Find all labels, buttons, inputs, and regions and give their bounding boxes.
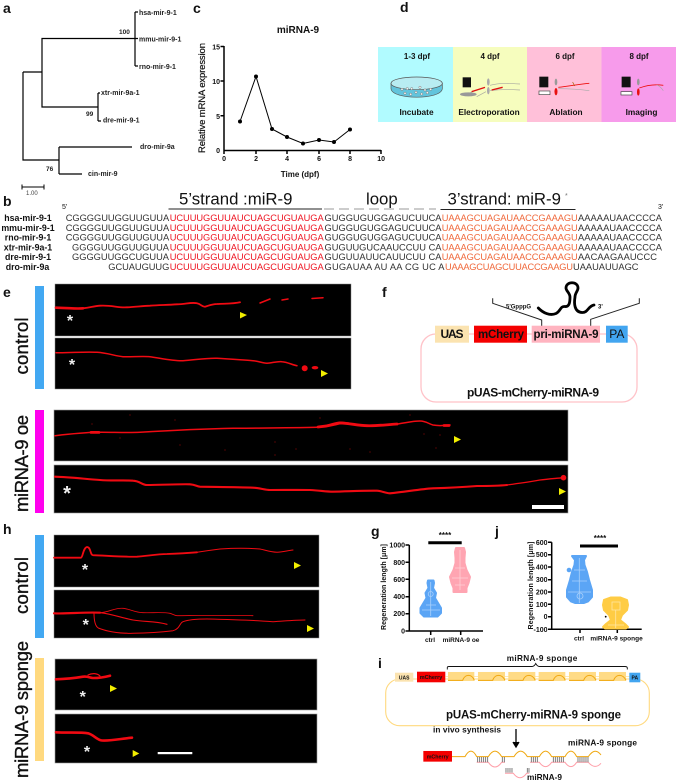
axis tick labels: 0 (216, 148, 220, 155)
insert lines and hairpin: 5'GpppG (506, 304, 531, 310)
x labels (425, 637, 480, 644)
aligned sequences: UAAAGCUAGAUAACCGAAAGU (442, 232, 578, 242)
species names: hsa-mir-9-1 (4, 213, 52, 223)
stage: electroporation: Electroporation (458, 107, 520, 117)
y tick labels: 400 (536, 564, 548, 572)
stage: ablation: 6 dpf (555, 52, 575, 61)
scale bar (158, 752, 192, 754)
aligned sequences (66, 213, 663, 272)
icon: petri dish (391, 77, 442, 97)
axis tick labels: 15 (212, 44, 220, 52)
axis tick labels: 10 (212, 79, 220, 86)
species labels: hsa-mir-9-1 (139, 10, 177, 17)
y tick labels (389, 542, 405, 636)
image: sponge 1: * (80, 689, 87, 706)
image: control 2 (55, 338, 351, 389)
icon: ablation rig (539, 77, 589, 95)
label b: b (3, 193, 12, 209)
strand headers: 5’ (62, 204, 68, 211)
aligned sequences: GCUAUGUUG (108, 262, 169, 272)
label e: e (3, 284, 11, 300)
panel h: axon images, control and miRNA-9 sponge (3, 521, 319, 778)
label f: f (382, 284, 387, 300)
stage: ablation: Ablation (549, 107, 583, 117)
axes (548, 542, 642, 633)
image: miRNA-9 oe 2: * (63, 483, 71, 505)
y tick labels: 300 (536, 577, 548, 584)
group label: miRNA-9 sponge (11, 641, 44, 778)
axis tick labels: 10 (377, 156, 385, 163)
bound miRNA strands (477, 762, 601, 767)
pri-miRNA-9 element (532, 326, 600, 343)
species labels: xtr-mir-9a-1 (101, 90, 140, 97)
x labels: ctrl (574, 636, 584, 642)
axis tick labels (212, 44, 385, 163)
species names: xtr-mir-9a-1 (4, 242, 52, 252)
mCherry box: mCherry (427, 754, 449, 760)
mCherry element: mCherry (478, 329, 525, 341)
insert lines and hairpin (493, 283, 639, 326)
group label: miRNA-9 oe: miRNA-9 oe (11, 415, 32, 512)
panel i: pUAS-mCherry-miRNA-9 sponge construct (378, 654, 649, 781)
chart title: miRNA-9 (277, 25, 320, 36)
image: sponge 2: * (84, 744, 91, 761)
image: control 1: * (82, 562, 89, 579)
stage: electroporation (453, 47, 527, 122)
image: sponge 1 (55, 659, 317, 710)
scale bar (532, 505, 564, 509)
strand headers (62, 190, 664, 211)
group label: control: control (11, 557, 32, 614)
aligned sequences: GGGGUUGGUUGUUA (72, 242, 170, 252)
mCherry element: mCherry (420, 675, 443, 681)
y tick labels: 200 (536, 590, 548, 596)
UAS element: UAS (440, 327, 464, 341)
label c: c (193, 0, 201, 16)
group label: control: control (11, 318, 32, 374)
y axis label: Relative mRNA expression (197, 43, 208, 153)
bootstrap values: 100 (119, 29, 130, 36)
scale bar: 1.00 (26, 191, 38, 197)
PA element: PA (632, 676, 638, 682)
violin: miRNA-9 oe (450, 548, 470, 592)
aligned sequences: UAAAGCUAGCUUACCGAAGU (445, 262, 573, 272)
strand headers: 3’strand: miR-9 (448, 190, 561, 208)
aligned sequences: UCUUUGGUUAUCUAGCUGUAUGA (170, 213, 324, 223)
bootstrap values (46, 29, 130, 173)
pri-miRNA-9 element: pri-miRNA-9 (534, 329, 598, 341)
plasmid outline (386, 679, 649, 726)
plasmid outline (421, 334, 637, 402)
insert lines and hairpin: 3' (598, 304, 603, 310)
y tick labels (533, 540, 548, 634)
image: control 2: * (69, 357, 76, 374)
species names: rno-mir-9-1 (5, 232, 51, 242)
aligned sequences: GUGAUAA AU AA CG UC A (324, 262, 445, 272)
sponge repeat units (445, 672, 630, 681)
arrow (513, 729, 519, 747)
image: sponge 2 (55, 714, 317, 763)
aligned sequences: AACAAGAAUCCC (578, 252, 657, 262)
icon: imaging rig (621, 77, 663, 96)
panel g: regeneration length violin plot (371, 523, 483, 644)
scale bar (22, 184, 44, 197)
mCherry element (474, 326, 527, 343)
aligned sequences: CGGGGUUGGUUGUUA (66, 213, 170, 223)
panel d: experimental timeline (378, 0, 676, 122)
panel a: phylogenetic tree (3, 0, 182, 197)
species names: dro-mir-9a (6, 262, 49, 272)
species labels: rno-mir-9-1 (139, 64, 176, 71)
y tick labels: 100 (536, 602, 548, 609)
group label: miRNA-9 oe (11, 410, 44, 513)
UAS element (435, 326, 469, 343)
base pair ticks (478, 757, 588, 762)
aligned sequences: UCUUUGGUUAUCUAGCUGUAUGA (170, 232, 324, 242)
violin: ctrl (420, 580, 441, 616)
panel j: regeneration length violin plot (494, 523, 643, 642)
group label: miRNA-9 sponge: miRNA-9 sponge (11, 641, 32, 778)
aligned sequences: UCUUUGGUUAUCUAGCUGUAUGA (170, 252, 324, 262)
x labels: miRNA-9 oe (443, 637, 480, 644)
stage: imaging (602, 47, 676, 122)
aligned sequences: GUGGUGUGGAGUCUUCA (324, 223, 442, 233)
free miRNA-9 (505, 773, 529, 778)
aligned sequences: AAAAAUAACCCCA (578, 232, 663, 242)
significance bar: **** (594, 534, 607, 543)
axis tick labels: 0 (222, 156, 226, 163)
y axis label: Regeneration length [μm] (381, 544, 388, 630)
plasmid name: pUAS-mCherry-miRNA-9 (467, 386, 599, 400)
icon: electroporation rig (460, 77, 520, 97)
panel c: miRNA-9 expression chart (193, 0, 385, 179)
species labels: dre-mir-9-1 (103, 118, 140, 124)
aligned sequences: UCUUUGGUUAUCUAGCUGUAUGA (170, 223, 324, 233)
aligned sequences: CGGGGUUGGUUGUUA (66, 223, 170, 233)
y tick labels: 800 (393, 560, 405, 567)
image: control 2 (54, 590, 319, 638)
aligned sequences: GUGGUGUGGAGUCUUCA (324, 213, 442, 223)
image: control 1 (54, 535, 319, 587)
y tick labels: 0 (544, 614, 548, 621)
image: control 2: * (83, 617, 90, 634)
aligned sequences: UAAAGCUAGAUAACCGAAAGU (442, 213, 578, 223)
stage: electroporation: 4 dpf (480, 52, 500, 61)
sponge strand (452, 751, 601, 757)
aligned sequences: GGGGUUGGCUGUUA (72, 252, 170, 262)
aligned sequences: AAAAAUAACCCCA (578, 223, 663, 233)
bracket (447, 664, 627, 670)
axes (220, 46, 381, 154)
axis tick labels: 6 (317, 156, 321, 163)
UAS element (395, 673, 413, 682)
label i: i (378, 655, 382, 671)
significance bar: **** (439, 531, 452, 540)
species names: dre-mir-9-1 (5, 252, 51, 262)
y tick labels: 0 (401, 628, 405, 636)
aligned sequences: UAAUAUUAGC (573, 262, 639, 272)
species labels: mmu-mir-9-1 (139, 36, 182, 44)
mCherry element (417, 672, 445, 682)
aligned sequences: UCUUUGGUUAUCUAGCUGUAUGA (170, 242, 324, 252)
panel f: pUAS-mCherry-miRNA-9 construct (382, 283, 639, 402)
species labels (88, 10, 182, 178)
axis tick labels: 8 (348, 156, 352, 163)
aligned sequences: AAAAAUAACCCCA (578, 242, 663, 252)
label g: g (371, 523, 380, 539)
stage: incubate: Incubate (399, 107, 434, 117)
sponge transcript label: miRNA-9 sponge (568, 738, 637, 748)
species labels: dro-mir-9a (140, 144, 175, 151)
axis tick labels: 5 (216, 114, 220, 121)
violin: ctrl (567, 556, 592, 603)
sponge heading: miRNA-9 sponge (507, 654, 578, 663)
group label: control (11, 535, 44, 638)
stage: imaging: Imaging (626, 107, 657, 117)
y axis label: Regeneration length [μm] (528, 542, 535, 630)
PA element: PA (609, 327, 624, 341)
y tick labels: 200 (393, 611, 405, 618)
label a: a (3, 0, 11, 16)
bootstrap values: 76 (46, 166, 54, 173)
image: miRNA-9 oe 1 (54, 410, 568, 461)
strand headers: * (565, 193, 568, 200)
axes (406, 545, 483, 635)
y tick labels: 400 (393, 594, 405, 601)
strand headers: 5’strand :miR-9 (179, 190, 292, 208)
significance bar (580, 534, 618, 546)
x labels: miRNA-9 sponge (590, 636, 643, 642)
aligned sequences: GUGGUGUGGAGUCUUCA (324, 232, 442, 242)
label j: j (494, 523, 499, 539)
y tick labels: 1000 (389, 542, 405, 550)
group label: control (11, 286, 44, 389)
image: control 1 (55, 284, 351, 336)
PA element (629, 673, 640, 682)
image: miRNA-9 oe 2 (54, 465, 568, 513)
species labels: cin-mir-9 (88, 171, 118, 178)
in vivo synthesis label: in vivo synthesis (433, 724, 501, 734)
aligned sequences: CGGGGUUGGUUGUUA (66, 232, 170, 242)
y tick labels: 600 (536, 540, 548, 547)
aligned sequences: UCUUUGGUUAUCUAGCUGUAUGA (170, 262, 324, 272)
strand headers: loop (366, 190, 398, 208)
panel e: axon images, control and miRNA-9 oe (3, 284, 568, 513)
y tick labels: 500 (536, 552, 548, 559)
stage: ablation (527, 47, 602, 122)
UAS element: UAS (399, 675, 410, 681)
axis tick labels: 2 (254, 156, 258, 163)
stage: incubate: 1-3 dpf (404, 52, 430, 61)
axis tick labels: 4 (285, 156, 289, 163)
violin: miRNA-9 sponge (603, 598, 628, 628)
x labels: ctrl (425, 637, 435, 644)
label h: h (3, 521, 12, 537)
aligned sequences: AAAAAUAACCCCA (578, 213, 663, 223)
aligned sequences: GUGUUAUUCAUUCUU CA (324, 252, 442, 262)
aligned sequences: GUGUUGUCAAUCCUU CA (324, 242, 442, 252)
aligned sequences: UAAAGCUAGAUAACCGAAAGU (442, 242, 578, 252)
aligned sequences: UAAAGCUAGAUAACCGAAAGU (442, 252, 578, 262)
stage: incubate (378, 47, 453, 122)
stage: imaging: 8 dpf (629, 52, 649, 61)
image: control 1: * (67, 313, 74, 330)
plasmid name: pUAS-mCherry-miRNA-9 sponge (446, 709, 621, 721)
panel b: sequence alignment (1, 190, 664, 272)
PA element (606, 326, 628, 343)
x axis label: Time (dpf) (281, 170, 320, 179)
species names (1, 213, 55, 272)
bootstrap values: 99 (86, 111, 94, 118)
y tick labels: 600 (393, 577, 405, 584)
y tick labels: -100 (533, 627, 548, 634)
data line (238, 74, 352, 146)
transcript diagram (423, 751, 601, 778)
aligned sequences: UAAAGCUAGAUAACCGAAAGU (442, 223, 578, 233)
strand headers: 3’ (658, 204, 664, 211)
tree branches (23, 12, 138, 174)
species names: mmu-mir-9-1 (1, 223, 55, 233)
mCherry box (423, 751, 452, 762)
